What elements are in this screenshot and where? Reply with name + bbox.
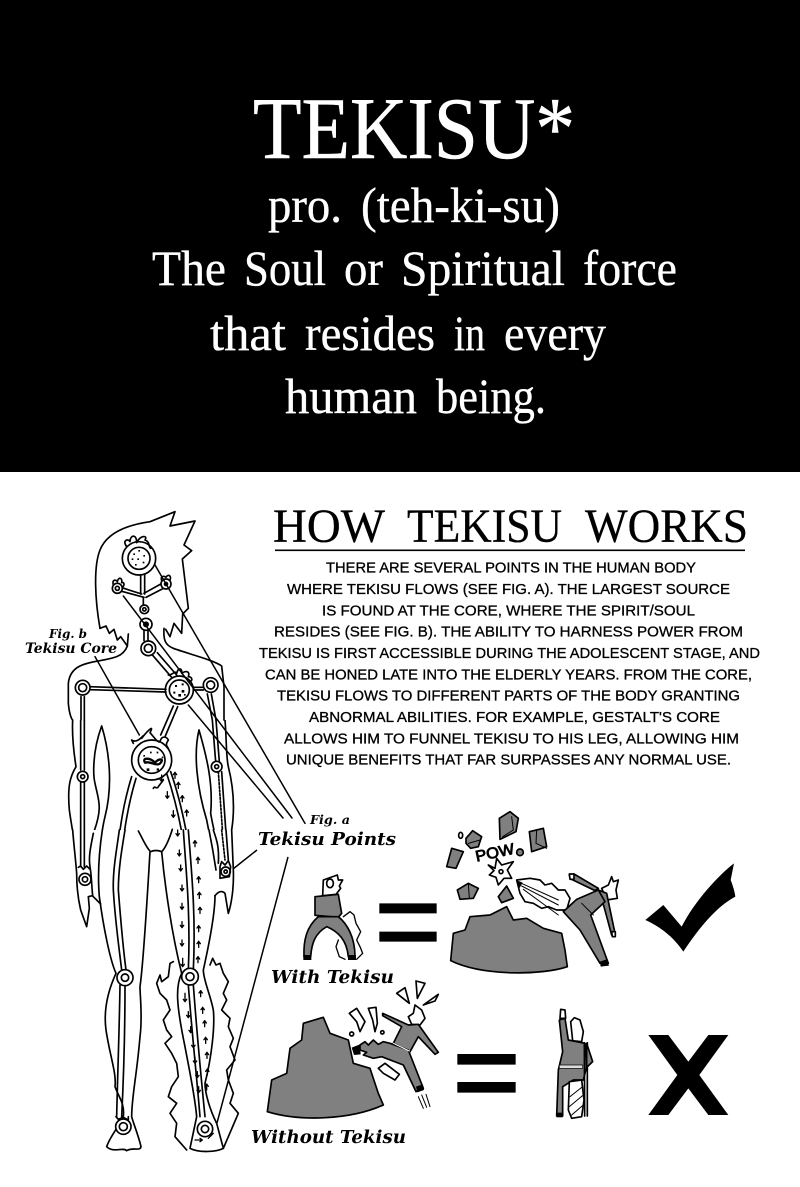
text block: explanation: RESIDES (SEE FIG. B). THE ABILITY TO HARNESS POWER FROM <box>274 625 743 641</box>
definition text: force <box>583 240 677 296</box>
definition text: human <box>285 368 417 424</box>
icon: equals sign <box>379 903 437 942</box>
pronunciation <box>268 177 560 233</box>
label: fig b tekisu core: Tekisu Core <box>25 641 117 657</box>
definition text: Soul <box>244 240 326 296</box>
row: with tekisu <box>271 812 735 988</box>
text block: explanation: ALLOWS HIM TO FUNNEL TEKISU TO HIS LEG, ALLOWING HIM <box>284 731 739 747</box>
icon: shattered rock and kick <box>447 812 618 973</box>
diagram: human body with tekisu points <box>68 512 305 1151</box>
label: fig a tekisu points: Fig. a <box>309 813 350 827</box>
text block: explanation: TEKISU FLOWS TO DIFFERENT PARTS OF THE BODY GRANTING <box>277 689 740 705</box>
body upper section <box>68 512 305 823</box>
definition text: Spiritual <box>401 240 565 296</box>
icon: powered figure <box>303 875 363 960</box>
text block: explanation: UNIQUE BENEFITS THAT FAR SURPASSES ANY NORMAL USE. <box>286 753 731 769</box>
icon: cross mark <box>648 1035 728 1115</box>
icon: shattered rock and kick: POW <box>474 841 517 866</box>
text block: explanation: TEKISU IS FIRST ACCESSIBLE DURING THE ADOLESCENT STAGE, AND <box>259 646 760 662</box>
text block: explanation: IS FOUND AT THE CORE, WHERE THE SPIRIT/SOUL <box>322 603 695 619</box>
icon: equals sign <box>457 1054 516 1093</box>
title: TEKISU* <box>253 81 575 178</box>
label: with tekisu: With Tekisu <box>271 967 394 988</box>
definition text: or <box>344 240 383 296</box>
heading: how tekisu works: HOW <box>273 500 386 553</box>
text block: explanation: WHERE TEKISU FLOWS (SEE FIG. A). THE LARGEST SOURCE <box>287 582 730 598</box>
text block: explanation <box>259 561 760 769</box>
text block: explanation: ABNORMAL ABILITIES. FOR EXAMPLE, GESTALT'S CORE <box>309 710 720 726</box>
icon: failed kick on rock <box>267 981 438 1118</box>
body middle section <box>68 720 234 830</box>
definition text <box>152 240 677 424</box>
panel: definition banner <box>0 0 800 472</box>
pronunciation: pro. <box>268 177 342 233</box>
icon: injured figure <box>557 1009 593 1118</box>
definition text: resides <box>305 305 435 361</box>
pronunciation: (teh-ki-su) <box>361 177 560 233</box>
definition text: that <box>210 305 286 361</box>
icon: check mark <box>645 863 735 952</box>
label: fig b tekisu core: Fig. b <box>48 627 87 641</box>
definition text: in <box>454 305 485 361</box>
text block: explanation: CAN BE HONED LATE INTO THE ELDERLY YEARS. FROM THE CORE, <box>265 667 752 683</box>
row: without tekisu <box>251 981 728 1148</box>
label: without tekisu: Without Tekisu <box>251 1127 406 1148</box>
label: fig b tekisu core <box>25 627 117 657</box>
heading: how tekisu works <box>273 500 748 553</box>
definition text: every <box>504 305 606 361</box>
label: fig a tekisu points <box>258 813 396 850</box>
definition text: being. <box>436 368 546 424</box>
text block: explanation: THERE ARE SEVERAL POINTS IN THE HUMAN BODY <box>326 561 696 577</box>
heading: how tekisu works: WORKS <box>585 500 748 553</box>
label: fig a tekisu points: Tekisu Points <box>258 829 396 850</box>
leader lines to wrist and foot points <box>217 850 288 1123</box>
definition text: The <box>152 240 226 296</box>
heading: how tekisu works: TEKISU <box>407 500 562 553</box>
body lower section <box>73 829 238 1151</box>
